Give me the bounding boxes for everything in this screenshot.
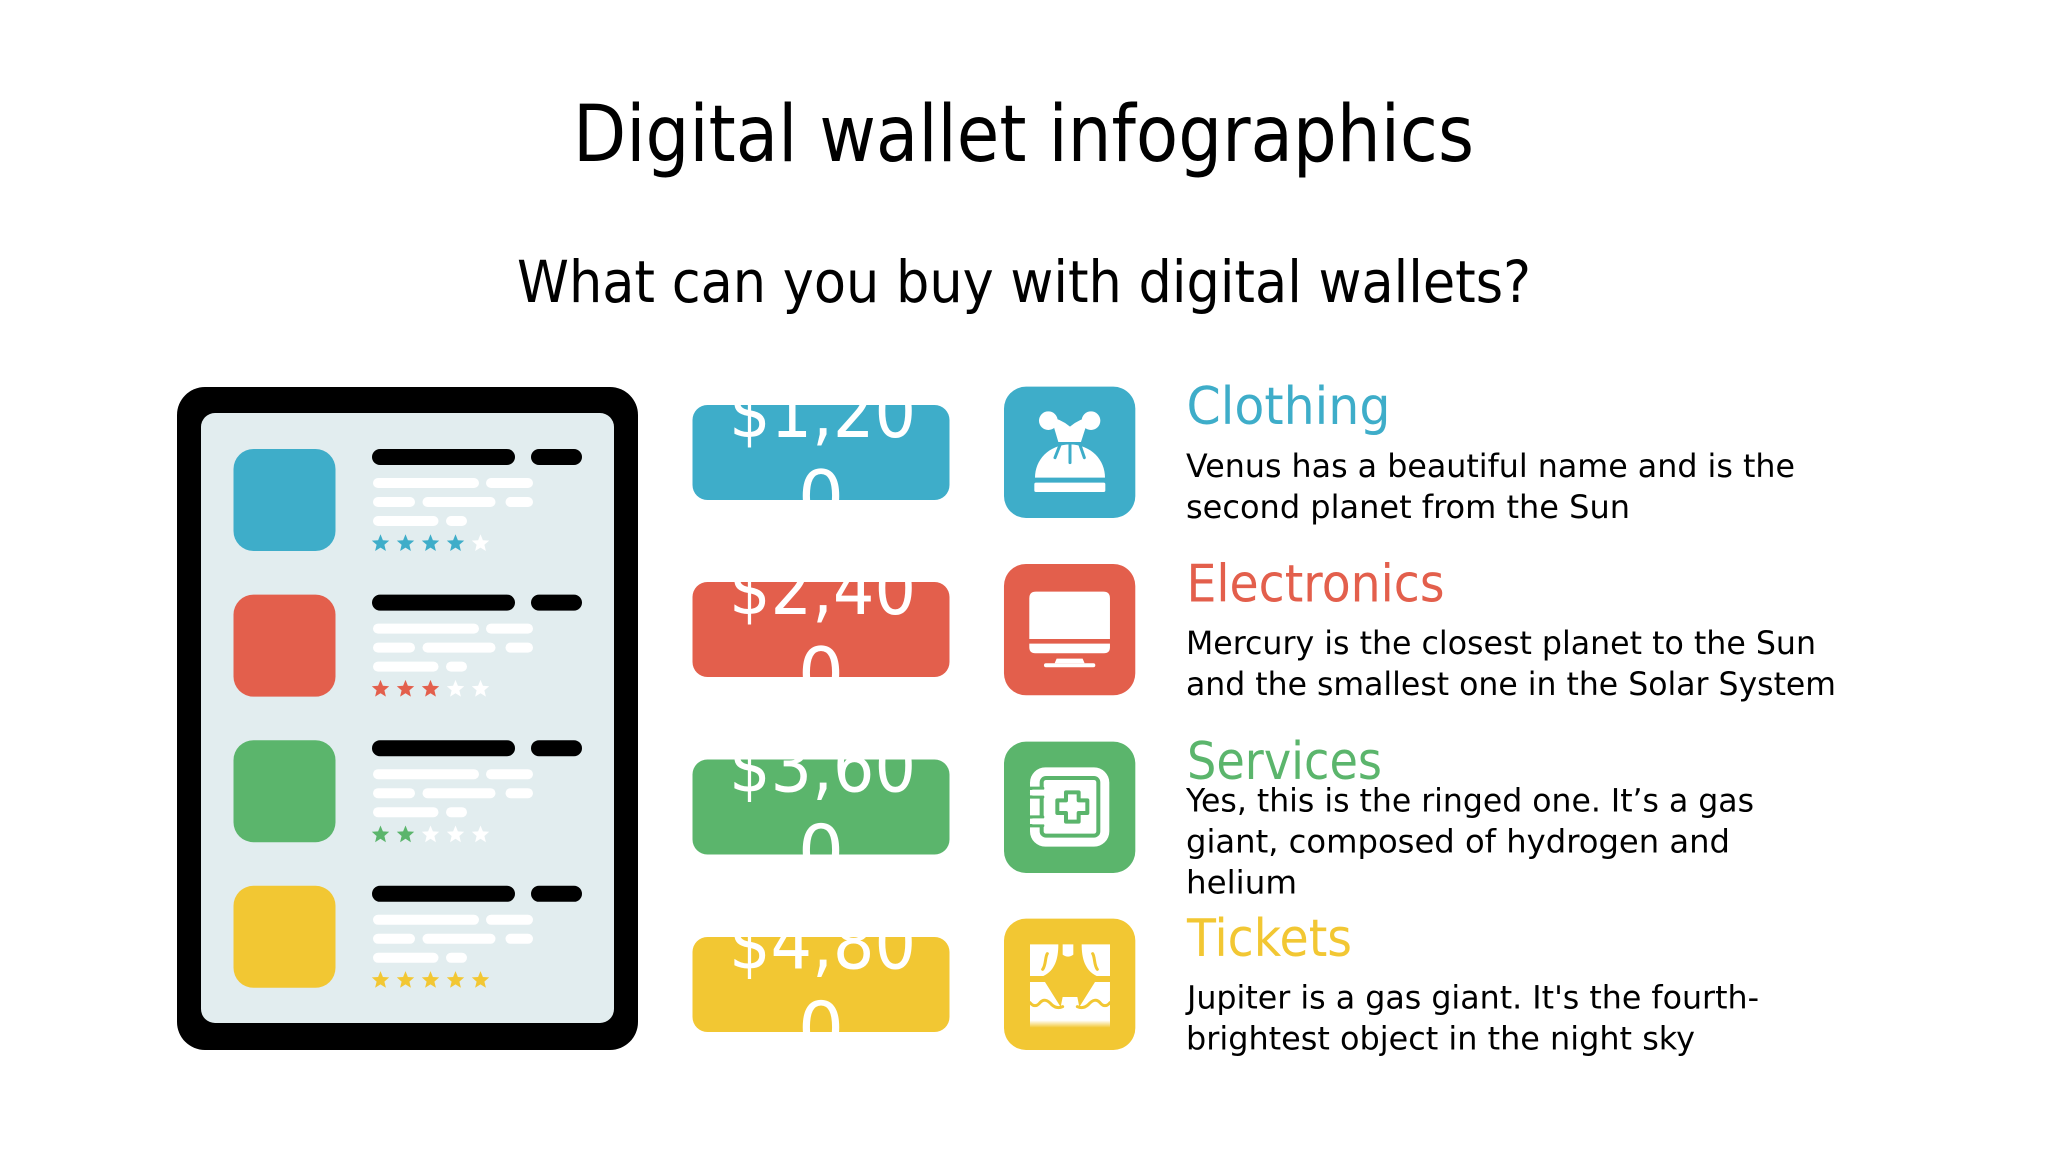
text block: tickets: brightest object in the night sky	[1186, 1020, 1695, 1058]
price badge: $4,800: $4,80	[729, 902, 916, 986]
price badge: $1,200	[692, 370, 950, 539]
price badge: $1,200: 0	[798, 455, 844, 539]
panel: tablet with product list	[177, 387, 638, 1050]
price badge: $4,800	[692, 902, 950, 1070]
list item 2: three of five stars	[234, 595, 582, 697]
text block: clothing: second planet from the Sun	[1186, 488, 1630, 526]
text block: electronics: Mercury is the closest planet to the Sun	[1186, 624, 1816, 662]
icon: monitor	[1004, 564, 1135, 695]
text block: clothing	[1186, 377, 1795, 526]
text block: electronics: Electronics	[1186, 554, 1444, 614]
tablet frame	[177, 387, 638, 1050]
price badge: $4,800: 0	[798, 986, 844, 1070]
list item 4: five of five stars	[234, 886, 582, 988]
tablet screen	[201, 413, 614, 1023]
text block: tickets: Jupiter is a gas giant. It's the fourth-	[1185, 978, 1759, 1016]
title: Digital wallet infographics	[573, 90, 1474, 180]
price badge: $2,400: 0	[798, 632, 844, 716]
icon: theatre curtains	[1004, 919, 1135, 1050]
text block: tickets: Tickets	[1186, 909, 1352, 969]
subtitle: What can you buy with digital wallets?	[517, 248, 1531, 316]
text block: services: Services	[1187, 732, 1382, 792]
price badge: $2,400: $2,40	[729, 547, 916, 631]
price badge: $3,600	[692, 724, 950, 894]
list item 1: four of five stars	[234, 449, 582, 551]
icon: dress	[1004, 387, 1135, 518]
text block: services: giant, composed of hydrogen and	[1186, 822, 1730, 860]
price badge: $2,400	[692, 547, 950, 716]
price badge: $1,200: $1,20	[729, 370, 916, 454]
text block: services: helium	[1186, 864, 1297, 902]
list item 3: two of five stars	[234, 740, 582, 842]
text block: services: Yes, this is the ringed one. It’s a gas	[1185, 782, 1754, 820]
text block: clothing: Clothing	[1186, 377, 1390, 437]
text block: clothing: Venus has a beautiful name and is the	[1186, 447, 1795, 485]
text block: services	[1185, 732, 1754, 902]
icon: medical notebook	[1004, 742, 1135, 873]
text block: electronics: and the smallest one in the Solar System	[1186, 665, 1836, 703]
price badge: $3,600: 0	[798, 810, 844, 894]
price badge: $3,600: $3,60	[729, 724, 916, 808]
text block: electronics	[1186, 554, 1836, 703]
text block: tickets	[1185, 909, 1759, 1058]
